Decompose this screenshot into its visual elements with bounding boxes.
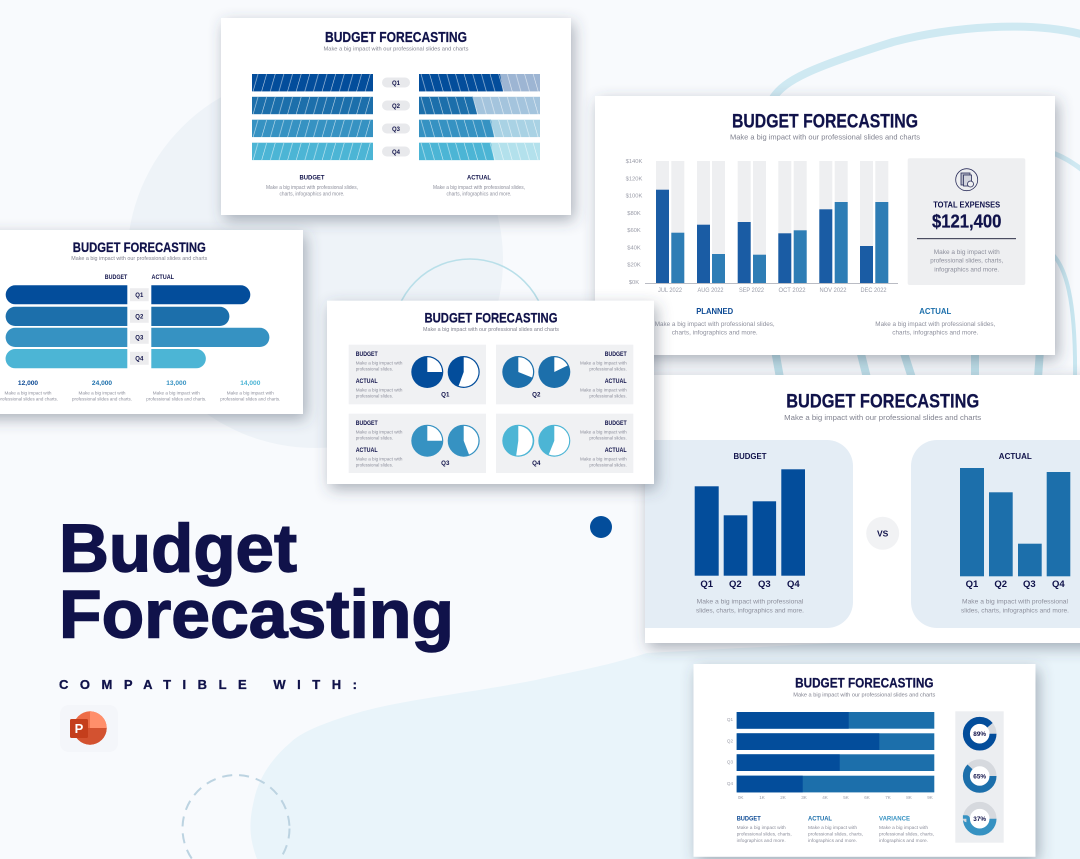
variance note: Make a big impact with (879, 825, 928, 831)
stat 12,000: 12,000 (18, 380, 38, 387)
heading: BUDGET FORECASTING (795, 675, 934, 691)
q1 tile: BUDGET (356, 351, 378, 358)
subheading: Make a big impact with our professional slides and charts (71, 256, 208, 262)
grouped bar chart: JUL 2022 (658, 288, 683, 294)
main title: Forecasting (59, 576, 454, 652)
stat 13,000: Make a big impact with (153, 390, 200, 395)
actual bars (419, 74, 540, 160)
budget tile: Q2 (729, 579, 742, 590)
grouped bar chart: $20K (627, 263, 641, 269)
budget caption (266, 174, 358, 197)
total expenses card: Make a big impact with (934, 249, 1000, 256)
q1 tile: professional slides. (356, 367, 393, 372)
grouped bar chart: DEC 2022 (860, 288, 887, 294)
main title (59, 510, 454, 652)
vs badge (866, 517, 899, 550)
total expenses card: $121,400 (932, 210, 1001, 231)
actual caption: ACTUAL (467, 174, 491, 181)
actual tile: Q3 (1023, 579, 1036, 590)
stacked bar chart: 1K (759, 795, 766, 800)
q4 tile: Q4 (532, 460, 541, 467)
q2 tile: Q2 (532, 392, 541, 398)
compatible with label: COMPATIBLE WITH: (59, 677, 357, 692)
q3 tile: Make a big impact with (356, 456, 403, 461)
grouped bar chart: AUG 2022 (698, 288, 724, 294)
actual caption: ACTUAL (919, 306, 951, 316)
budget note: Make a big impact with (737, 825, 786, 831)
q3 tile: Make a big impact with (356, 429, 403, 434)
stacked bar chart: 5K (843, 795, 850, 800)
q1 tile: professional slides. (356, 394, 393, 399)
q4 tile: ACTUAL (605, 447, 627, 454)
budget note: professional slides, charts, (737, 831, 792, 837)
q1 tile: ACTUAL (356, 378, 378, 385)
grouped bar chart: SEP 2022 (739, 288, 765, 294)
panel: budget vs actual columns (645, 375, 1080, 643)
actual caption: Make a big impact with professional slides, (875, 321, 995, 328)
stat 14,000: 14,000 (240, 380, 261, 387)
stat 14,000: professional slides and charts. (220, 396, 280, 401)
subheading: Make a big impact with our professional slides and charts (324, 46, 469, 52)
quarter pills: Q2 (392, 104, 401, 110)
stacked bar chart: Q2 (727, 738, 734, 743)
grouped bar chart: NOV 2022 (820, 288, 847, 294)
q3 tile: ACTUAL (356, 447, 378, 454)
q4 tile: professional slides. (589, 463, 627, 468)
stacked bar chart: Q1 (727, 717, 734, 722)
budget caption: BUDGET (300, 174, 325, 181)
stacked bar chart: Q3 (727, 760, 734, 765)
stat 13,000: 13,000 (166, 380, 187, 387)
budget caption: Make a big impact with professional slides, (266, 185, 358, 191)
grouped bar chart: $40K (627, 245, 641, 251)
actual tile: slides, charts, infographics and more. (961, 608, 1069, 615)
stat 12,000 (0, 380, 58, 401)
variance note: professional slides, charts, (879, 831, 934, 837)
budget bars (252, 74, 373, 160)
q4 tile: Make a big impact with (580, 456, 627, 461)
budget tile: slides, charts, infographics and more. (696, 608, 804, 615)
q2 tile: Make a big impact with (580, 360, 627, 365)
actual caption (433, 174, 525, 197)
stat 14,000: Make a big impact with (227, 390, 274, 395)
grouped bar chart: $60K (627, 228, 641, 234)
actual note: Make a big impact with (808, 825, 857, 831)
quarter tiles: Q2 (135, 314, 144, 320)
subheading: Make a big impact with our professional slides and charts (793, 692, 935, 698)
panel: rounded butterfly bars (0, 230, 303, 414)
actual tile: Q2 (994, 579, 1007, 590)
donut 65%: 65% (973, 773, 986, 780)
q2 tile: BUDGET (605, 351, 627, 358)
grouped bar chart: $140K (626, 159, 643, 165)
heading: BUDGET FORECASTING (424, 311, 558, 326)
quarter pills (382, 78, 410, 156)
budget note: infographics and more. (737, 838, 786, 844)
variance note: VARIANCE (879, 815, 910, 822)
q2 tile: Make a big impact with (580, 387, 627, 392)
budget tile: Make a big impact with professional (697, 599, 804, 606)
q2 tile: professional slides. (589, 367, 627, 372)
actual caption: charts, infographics and more. (892, 330, 978, 337)
planned caption: Make a big impact with professional slides, (655, 321, 775, 328)
budget bars (6, 285, 127, 368)
stacked bar chart: Q4 (727, 781, 734, 786)
heading: BUDGET FORECASTING (786, 391, 979, 412)
actual tile: ACTUAL (999, 452, 1032, 461)
budget tile: Q3 (758, 579, 771, 590)
grouped bar chart: $0K (629, 280, 639, 286)
total expenses card: infographics and more. (934, 266, 999, 273)
total expenses card: professional slides, charts, (930, 258, 1003, 265)
panel: stacked bars and donuts (694, 664, 1036, 857)
stat 13,000: professional slides and charts. (146, 396, 206, 401)
q2 tile: professional slides. (589, 394, 627, 399)
actual tile: Q4 (1052, 579, 1065, 590)
stat 24,000 (72, 380, 132, 401)
q4 tile: professional slides. (589, 436, 627, 441)
stacked bar chart: 2K (780, 795, 787, 800)
stat 14,000 (220, 380, 280, 401)
q4 tile (496, 414, 633, 473)
budget note (737, 815, 792, 844)
stacked bar chart: 3K (801, 795, 808, 800)
quarter tiles: Q3 (135, 335, 144, 341)
panel: monthly bar chart (595, 96, 1055, 355)
stat 24,000: 24,000 (92, 380, 112, 387)
q1 tile: Make a big impact with (356, 387, 403, 392)
q4 tile: Make a big impact with (580, 429, 627, 434)
vs badge: VS (877, 528, 889, 538)
total expenses card (908, 158, 1025, 285)
budget column chart (695, 469, 805, 576)
planned caption (655, 306, 775, 337)
icon: powerpoint (60, 705, 118, 752)
q3 tile: Q3 (441, 460, 450, 467)
stacked bar chart: 6K (864, 795, 871, 800)
panel: hatched bars (221, 18, 571, 215)
actual bars (151, 285, 269, 368)
stacked bar chart (727, 712, 934, 800)
subheading: Make a big impact with our professional slides and charts (423, 327, 559, 333)
heading: BUDGET FORECASTING (73, 240, 206, 255)
budget tile (645, 440, 853, 628)
planned caption: PLANNED (696, 306, 733, 316)
quarter pills: Q1 (392, 81, 401, 87)
subheading: Make a big impact with our professional slides and charts (730, 132, 920, 142)
stacked bar chart: 0K (738, 795, 744, 800)
q4 tile: BUDGET (605, 420, 627, 427)
actual note: ACTUAL (808, 815, 832, 822)
grouped bar chart: $80K (627, 211, 641, 217)
variance note (879, 815, 934, 844)
grouped bar chart: OCT 2022 (778, 288, 806, 294)
stat 24,000: professional slides and charts. (72, 396, 132, 401)
quarter tiles: Q4 (135, 356, 144, 362)
actual note: infographics and more. (808, 838, 857, 844)
budget tile: Q1 (700, 579, 714, 590)
budget tile: Q4 (787, 579, 800, 590)
q2 tile: ACTUAL (605, 378, 627, 385)
actual tile: Q1 (966, 579, 979, 590)
stacked bar chart: 9K (927, 795, 934, 800)
actual tile: Make a big impact with professional (962, 599, 1068, 606)
column labels (105, 274, 174, 281)
budget caption: charts, infographics and more. (280, 191, 344, 197)
actual column chart (960, 468, 1070, 576)
column labels: ACTUAL (152, 274, 174, 281)
grouped bar chart (626, 159, 898, 294)
actual tile (911, 440, 1080, 628)
actual caption: charts, infographics and more. (446, 191, 512, 197)
panel: pie charts (327, 301, 654, 484)
actual note (808, 815, 863, 844)
heading: BUDGET FORECASTING (325, 30, 467, 46)
grouped bar chart: $120K (626, 176, 643, 182)
q1 tile (349, 345, 486, 404)
column labels: BUDGET (105, 274, 127, 281)
stat 13,000 (146, 380, 206, 401)
total expenses card: TOTAL EXPENSES (933, 200, 1001, 210)
budget tile: BUDGET (734, 452, 767, 461)
q3 tile: BUDGET (356, 420, 378, 427)
quarter tiles (130, 288, 149, 365)
budget note: BUDGET (737, 815, 761, 822)
stat 12,000: Make a big impact with (4, 390, 52, 395)
actual caption: Make a big impact with professional slides, (433, 185, 525, 191)
grouped bar chart: $100K (626, 194, 643, 200)
quarter pills: Q3 (392, 127, 401, 133)
donut column (955, 711, 1004, 843)
dashed circle decoration (182, 775, 290, 859)
icon: expense documents (956, 169, 978, 191)
stacked bar chart: 8K (906, 795, 913, 800)
planned caption: charts, infographics and more. (672, 330, 758, 337)
stat 24,000: Make a big impact with (78, 390, 126, 395)
actual note: professional slides, charts, (808, 831, 863, 837)
stacked bar chart: 4K (822, 795, 829, 800)
q3 tile: professional slides. (356, 463, 393, 468)
heading: BUDGET FORECASTING (732, 111, 918, 132)
donut 37%: 37% (973, 816, 986, 823)
q3 tile: professional slides. (356, 436, 393, 441)
quarter pills: Q4 (392, 150, 401, 156)
stacked bar chart: 7K (885, 795, 892, 800)
subheading: Make a big impact with our professional slides and charts (784, 413, 982, 422)
q2 tile (496, 345, 633, 404)
q3 tile (349, 414, 486, 473)
variance note: infographics and more. (879, 838, 928, 844)
q1 tile: Make a big impact with (356, 360, 403, 365)
blue dot (590, 516, 612, 538)
actual caption (875, 306, 995, 337)
quarter tiles: Q1 (135, 293, 144, 299)
q1 tile: Q1 (441, 392, 450, 398)
donut 89%: 89% (973, 731, 986, 738)
icon: powerpoint: P (75, 721, 84, 736)
main title: Budget (59, 510, 297, 586)
